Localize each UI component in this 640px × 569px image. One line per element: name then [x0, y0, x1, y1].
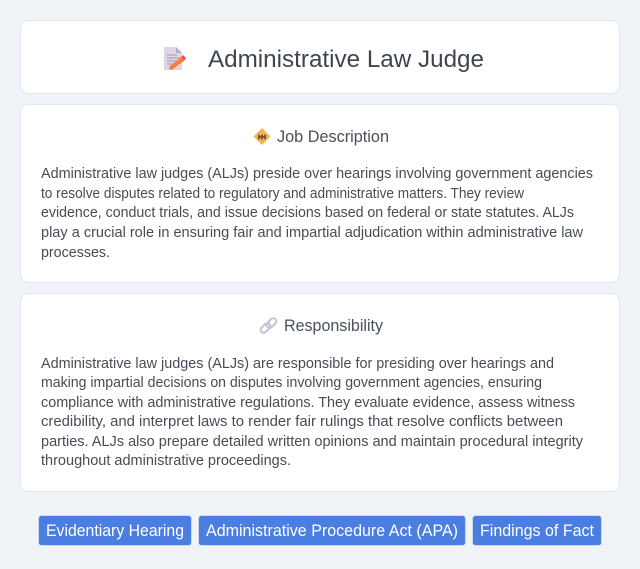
text: responsibility body: making impartial decisions on disputes involving government agencies, ensuring — [41, 375, 542, 391]
tag: Administrative Procedure Act (APA) — [198, 516, 466, 546]
icon: chain link — [259, 317, 278, 334]
tag: Findings of Fact: Findings of Fact — [480, 522, 594, 540]
text: responsibility body: compliance with administrative regulations. They evaluate evidence, assess witness — [41, 395, 575, 411]
text: job description body — [41, 166, 593, 261]
heading: job description: Job Description — [277, 127, 389, 146]
text: job description body: evidence, conduct trials, and issue decisions based on federal or state statutes. ALJs — [41, 205, 574, 221]
text: job description body: processes. — [41, 245, 110, 261]
text: responsibility body: credibility, and interpret laws to render fair rulings that resolve conflicts between — [41, 414, 563, 430]
text: responsibility body: throughout administrative proceedings. — [41, 453, 291, 469]
panel: title — [20, 20, 620, 94]
text: job description body: to resolve disputes related to regulatory and administrative matters. They review — [41, 186, 525, 202]
tag: Evidentiary Hearing — [38, 516, 192, 546]
text: responsibility body: parties. ALJs also prepare detailed written opinions and maintain procedural integrity — [41, 434, 584, 450]
heading: responsibility: Responsibility — [284, 316, 384, 335]
heading: title: Administrative Law Judge — [208, 46, 484, 73]
text: responsibility body — [41, 356, 584, 469]
text: job description body: Administrative law judges (ALJs) preside over hearings involving government agencies — [41, 166, 593, 182]
tag: Evidentiary Hearing: Evidentiary Hearing — [46, 522, 184, 540]
text: job description body: play a crucial role in ensuring fair and impartial adjudication within administrative law — [41, 225, 584, 241]
icon: document with pencil — [164, 47, 186, 70]
tag: Administrative Procedure Act (APA): Administrative Procedure Act (APA) — [206, 522, 458, 540]
panel: job description — [20, 104, 620, 282]
tag: Findings of Fact — [472, 516, 602, 546]
panel: responsibility — [20, 294, 620, 492]
text: responsibility body: Administrative law judges (ALJs) are responsible for presiding over hearings and — [41, 356, 554, 372]
icon: diamond sign — [254, 128, 270, 145]
